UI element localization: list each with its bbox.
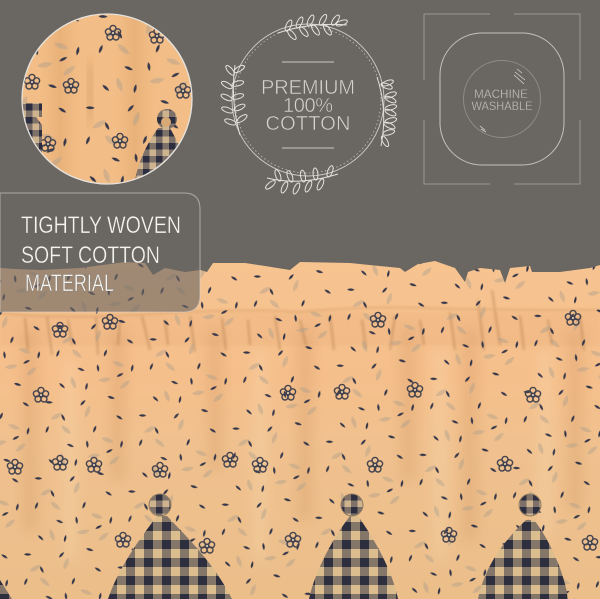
premium cotton badge <box>220 13 397 195</box>
circle gingham right <box>135 128 178 178</box>
flowers <box>7 310 598 553</box>
button 2 <box>341 494 363 516</box>
button 1 <box>149 494 171 516</box>
text panel <box>0 193 200 312</box>
gingham triangle 2 <box>309 516 398 599</box>
panel text: MATERIAL <box>25 270 114 297</box>
bracket frame <box>424 14 580 184</box>
gingham triangle 1 <box>108 516 232 599</box>
fabric print <box>0 255 600 599</box>
laurel top <box>278 13 348 41</box>
panel text: SOFT COTTON <box>21 242 160 269</box>
badge text: COTTON <box>266 113 350 135</box>
badge text: PREMIUM <box>261 77 355 99</box>
gingham triangle 3 <box>478 520 568 599</box>
washable text <box>472 87 532 113</box>
fabric folds <box>30 330 575 540</box>
rod pocket shading <box>0 312 600 346</box>
badge text <box>261 77 355 135</box>
badge rules <box>282 62 334 148</box>
panel text: TIGHTLY WOVEN <box>21 212 181 239</box>
badge text: 100% <box>283 95 333 117</box>
laurel left <box>220 64 248 135</box>
panel text <box>21 212 181 297</box>
washable text: WASHABLE <box>472 99 532 113</box>
wreath ring <box>232 24 384 176</box>
curtain valance photo <box>0 255 600 599</box>
fabric highlights <box>70 350 545 560</box>
button 3 <box>519 494 541 516</box>
rounded square <box>440 33 564 165</box>
circle gingham left <box>22 103 42 152</box>
close-up circle photo <box>21 13 193 185</box>
sheen marks <box>480 69 525 132</box>
inner circle <box>464 60 540 138</box>
machine washable badge <box>424 14 580 184</box>
laurel right <box>377 77 397 148</box>
gathers <box>0 290 600 355</box>
gingham corner <box>0 580 12 599</box>
washable text: MACHINE <box>474 87 528 101</box>
laurel bottom <box>264 165 338 195</box>
